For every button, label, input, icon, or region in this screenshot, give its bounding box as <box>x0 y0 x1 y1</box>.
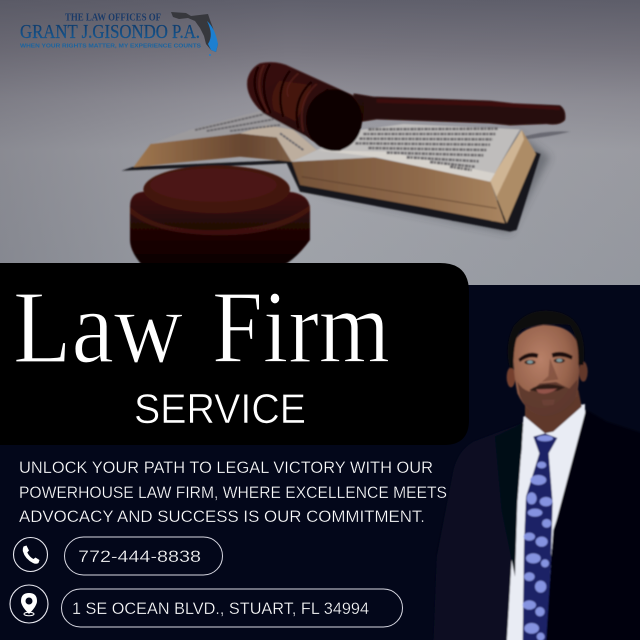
phone pill <box>64 537 222 575</box>
headline panel <box>0 263 469 445</box>
logo: tagline: WHEN YOUR RIGHTS MATTER, MY EXPERIENCE COUNTS <box>20 44 202 50</box>
address pill: 1 SE OCEAN BLVD., STUART, FL 34994 <box>72 599 369 618</box>
hair <box>508 311 584 368</box>
icon: phone <box>14 538 48 572</box>
nose shadow <box>542 358 558 382</box>
title: Law Firm: Law <box>13 270 183 385</box>
body text <box>19 458 447 526</box>
gavel head <box>247 62 364 151</box>
sounding block <box>130 165 310 270</box>
neck <box>525 390 582 433</box>
dark navy lower background <box>0 285 640 640</box>
eyes and brows <box>518 353 538 362</box>
left page surface <box>151 111 317 162</box>
logo: firm name: THE LAW OFFICES OF <box>65 12 161 24</box>
logo: attorney name: GRANT J.GISONDO P.A. <box>20 22 200 43</box>
suit jacket <box>433 410 640 640</box>
title: Law Firm <box>13 270 390 385</box>
subtitle: SERVICE: SERVICE <box>134 385 306 432</box>
book cover <box>122 150 541 232</box>
icon: location pin <box>10 585 48 623</box>
phone pill: 772-444-8838 <box>78 547 201 566</box>
ears <box>507 367 515 387</box>
body text: UNLOCK YOUR PATH TO LEGAL VICTORY WITH OUR <box>19 458 433 477</box>
logo <box>20 12 218 56</box>
title: Law Firm: Firm <box>212 270 390 385</box>
body text: ADVOCACY AND SUCCESS IS OUR COMMITMENT. <box>19 507 425 526</box>
body text: POWERHOUSE LAW FIRM, WHERE EXCELLENCE MEETS <box>19 483 447 502</box>
address pill <box>62 589 402 627</box>
face <box>513 325 579 416</box>
right page edge <box>292 157 505 223</box>
beard <box>517 379 577 416</box>
logo: Florida map <box>171 12 218 56</box>
jacket lapel <box>550 413 607 567</box>
gavel handle <box>353 93 565 125</box>
book and gavel illustration <box>122 62 570 270</box>
portrait of attorney <box>433 311 640 640</box>
printed text on left page <box>195 114 303 150</box>
white shirt <box>507 404 585 640</box>
right page surface <box>292 124 520 182</box>
left page block <box>133 133 292 167</box>
patterned tie <box>523 433 557 640</box>
photo background: gavel and book on a table <box>0 0 640 300</box>
printed text on right page <box>355 129 498 170</box>
